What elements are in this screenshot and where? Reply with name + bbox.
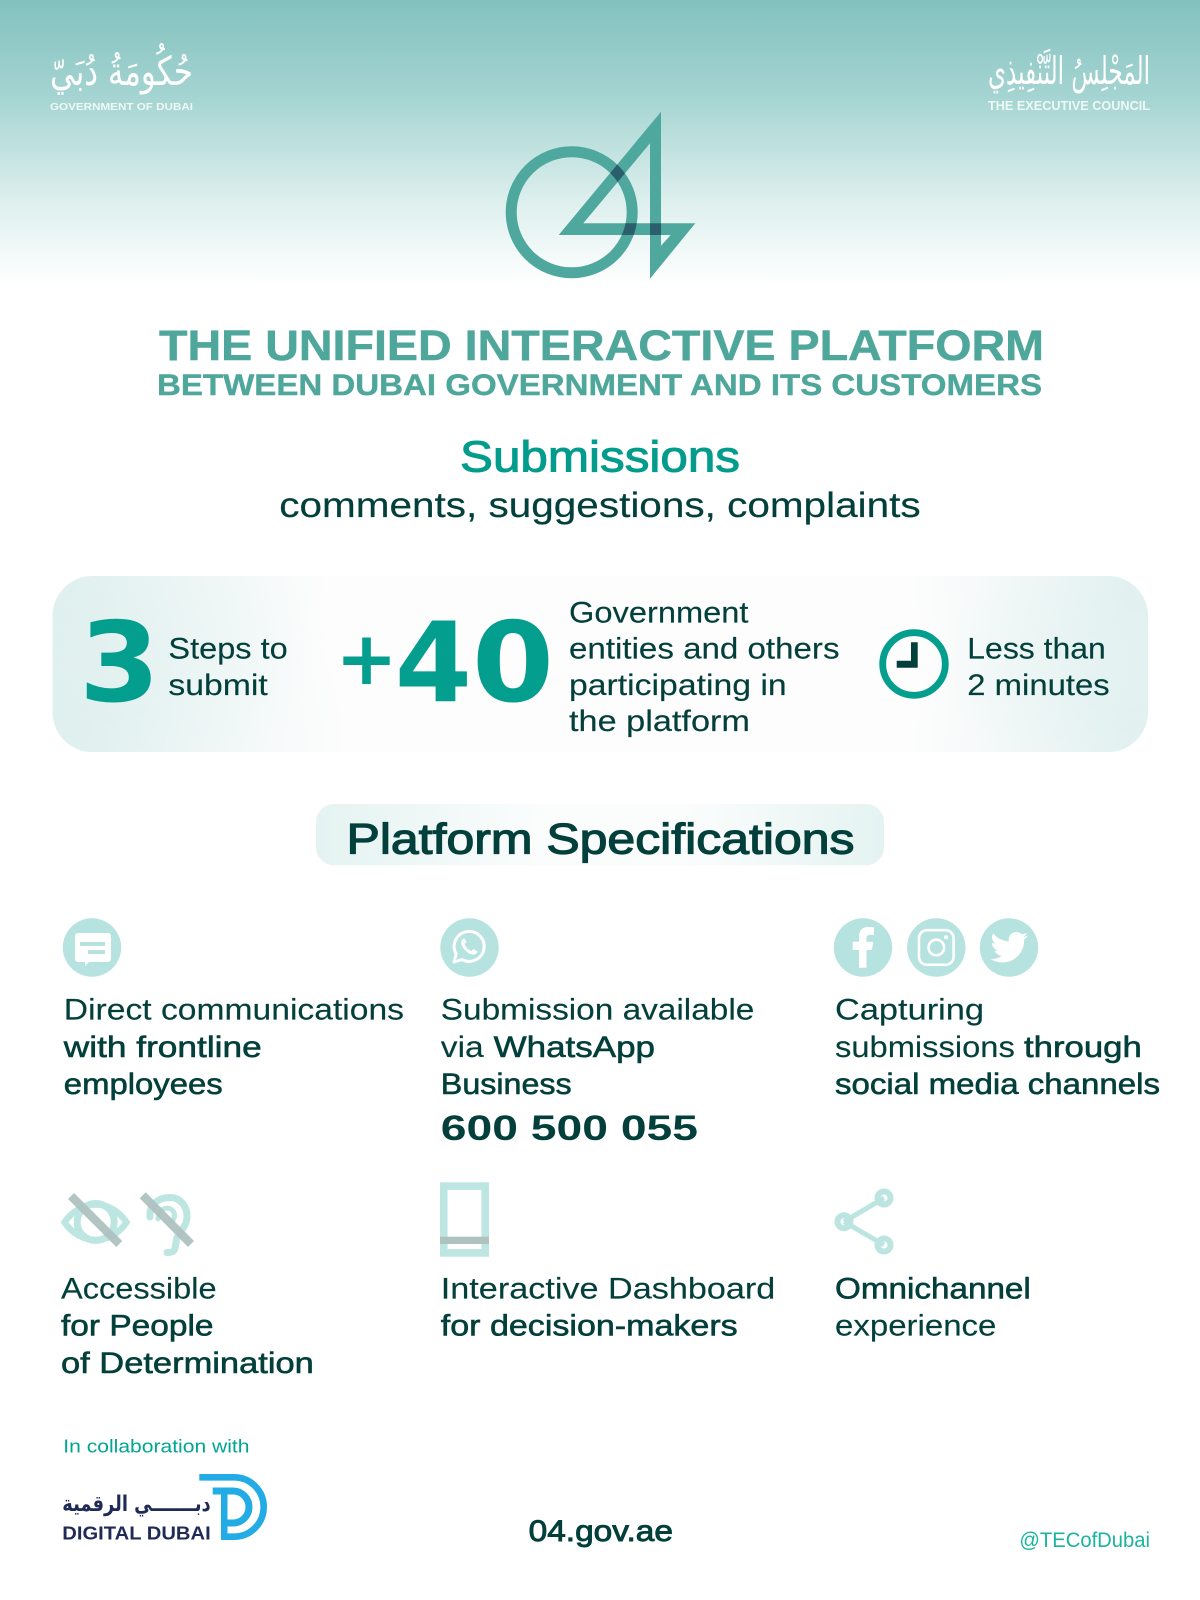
spec: accessibility: of Determination — [61, 1347, 314, 1380]
stat: +40 entities — [336, 597, 840, 738]
icon: facebook — [834, 918, 892, 977]
icon: phone dashboard — [440, 1186, 489, 1253]
spec: direct communications: with frontline — [63, 1031, 262, 1064]
website address: 04.gov.ae — [529, 1515, 673, 1548]
logo: Government of Dubai: GOVERNMENT OF DUBAI — [50, 102, 193, 113]
stat: +40 entities: + — [336, 616, 398, 702]
stat: less than 2 minutes: Less than — [967, 632, 1106, 665]
spec: direct communications: employees — [64, 1068, 223, 1101]
logo: Government of Dubai — [50, 42, 193, 113]
spec: social media: Capturing — [835, 994, 984, 1026]
icon: instagram — [907, 918, 966, 977]
stat: less than 2 minutes: 2 minutes — [967, 669, 1110, 702]
spec: whatsapp business: Submission available — [441, 994, 754, 1026]
logo: The Executive Council — [988, 48, 1150, 113]
stat: 3 steps — [79, 599, 288, 728]
icon: whatsapp — [440, 918, 499, 977]
social handle: @TECofDubai — [1019, 1528, 1150, 1552]
heading: Submissions: Submissions — [460, 433, 740, 482]
stat: +40 entities: 0 — [472, 599, 554, 728]
spec: whatsapp business: 600 500 055 — [441, 1109, 698, 1148]
heading: Platform Specifications — [316, 804, 884, 865]
stat: +40 entities: participating in — [569, 669, 787, 702]
icon: chat bubble — [63, 918, 121, 977]
spec: accessibility — [61, 1273, 314, 1380]
stat: 3 steps: submit — [168, 669, 269, 702]
icon: twitter — [980, 918, 1038, 977]
stat: +40 entities: entities and others — [569, 633, 840, 666]
panel: key figures — [52, 576, 1148, 752]
subheading: comments, suggestions, complaints — [279, 486, 921, 525]
spec: direct communications — [63, 994, 404, 1101]
stat: less than 2 minutes — [967, 632, 1110, 702]
spec: direct communications: Direct communications — [64, 994, 404, 1026]
heading: Platform Specifications: Platform Specifications — [346, 816, 854, 864]
icon: eye crossed out — [64, 1196, 126, 1244]
logo: Digital Dubai — [62, 1477, 264, 1543]
logo: Digital Dubai: DIGITAL DUBAI — [62, 1523, 211, 1543]
stat: +40 entities: 4 — [395, 599, 472, 728]
header gradient — [0, 0, 1200, 285]
spec: dashboard — [441, 1273, 775, 1342]
title: THE UNIFIED INTERACTIVE PLATFORM — [159, 322, 1044, 370]
spec: omnichannel: Omnichannel — [835, 1273, 1031, 1306]
spec: social media: social media channels — [835, 1068, 1160, 1101]
spec: accessibility: Accessible — [61, 1273, 217, 1306]
collaboration label: In collaboration with — [63, 1436, 249, 1457]
spec: omnichannel: experience — [835, 1310, 996, 1342]
icon: share nodes — [838, 1192, 890, 1252]
logo: 04 mark — [511, 112, 695, 279]
icon: ear crossed out — [143, 1195, 191, 1252]
spec: whatsapp business — [441, 994, 754, 1148]
spec: omnichannel — [835, 1273, 1031, 1342]
logo: The Executive Council: THE EXECUTIVE COUNCIL — [988, 99, 1150, 113]
title: BETWEEN DUBAI GOVERNMENT AND ITS CUSTOMERS — [157, 369, 1042, 402]
stat: +40 entities: Government — [569, 597, 749, 630]
title — [157, 322, 1044, 402]
spec: whatsapp business: Business — [441, 1068, 572, 1101]
spec: dashboard: Interactive Dashboard — [441, 1273, 775, 1306]
stat: 3 steps: 3 — [79, 599, 160, 728]
logo: Government of Dubai: حُكُومَةُ دُبَيّ — [50, 42, 193, 95]
stat: 3 steps: Steps to — [168, 632, 288, 665]
icon: clock — [883, 633, 945, 695]
spec: dashboard: for decision-makers — [441, 1310, 738, 1342]
spec: whatsapp business: via — [441, 1031, 484, 1064]
spec: social media: through — [1024, 1031, 1142, 1064]
spec: social media: submissions — [835, 1031, 1015, 1064]
stat: +40 entities: the platform — [569, 705, 750, 738]
spec: social media — [835, 994, 1160, 1101]
logo: Digital Dubai: دبـــــــي الرقمية — [62, 1492, 211, 1517]
spec: accessibility: for People — [61, 1310, 214, 1342]
spec: whatsapp business: WhatsApp — [494, 1031, 655, 1064]
